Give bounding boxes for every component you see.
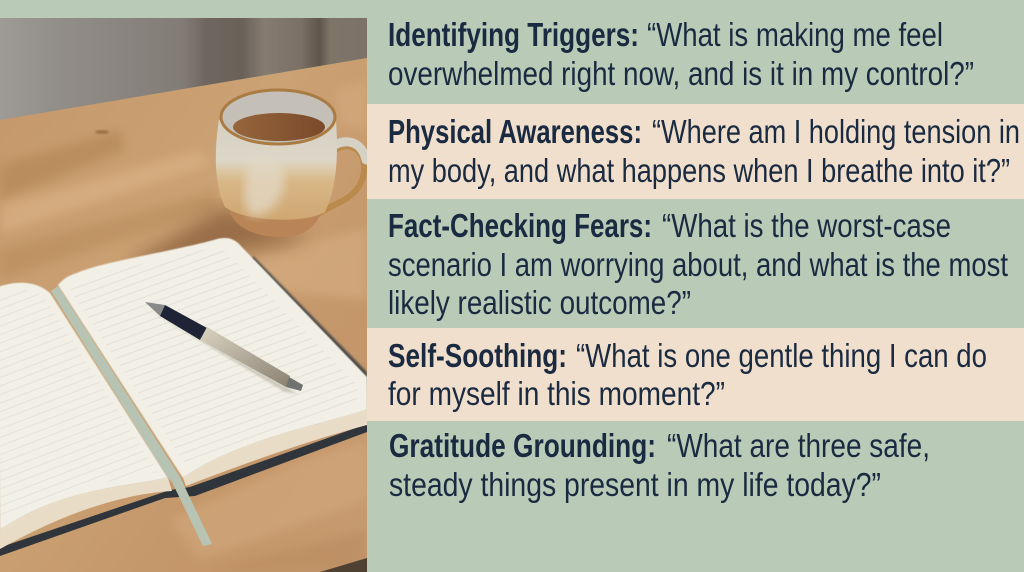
prompt heading: Fact-Checking Fears: bbox=[388, 207, 652, 244]
prompt heading: Self-Soothing: bbox=[388, 337, 567, 374]
prompt text: “What is the worst-case bbox=[662, 207, 951, 244]
mug rim bbox=[221, 90, 335, 144]
panel: gratitude grounding bbox=[367, 421, 1024, 572]
prompt heading: Gratitude Grounding: bbox=[389, 427, 656, 464]
panel: physical awareness bbox=[367, 104, 1024, 199]
mug foot bbox=[229, 210, 322, 237]
prompt heading: Identifying Triggers: bbox=[388, 16, 639, 53]
open notebook bbox=[0, 238, 367, 556]
panel: identifying triggers bbox=[367, 16, 1024, 104]
wooden table bbox=[0, 58, 367, 572]
icon: ceramic mug bbox=[216, 90, 366, 237]
tea bbox=[233, 113, 325, 141]
panel: self-soothing bbox=[367, 328, 1024, 421]
prompt text: “What is making me feel bbox=[647, 16, 943, 53]
prompt text line 2: for myself in this moment?” bbox=[388, 375, 725, 412]
left page bbox=[0, 283, 168, 530]
icon: pen bbox=[145, 302, 303, 391]
mug shadow bbox=[129, 199, 305, 259]
ribbon bookmark bbox=[51, 286, 212, 546]
pen shadow bbox=[164, 320, 296, 394]
wall with curtain bbox=[0, 18, 367, 128]
prompt text: “What are three safe, bbox=[667, 427, 930, 464]
page block bbox=[183, 410, 367, 486]
prompt text line 2: steady things present in my life today?” bbox=[389, 466, 881, 503]
panel: fact-checking fears bbox=[367, 199, 1024, 328]
photo: journal and mug on a wooden table bbox=[0, 18, 367, 572]
prompt text line 3: likely realistic outcome?” bbox=[388, 284, 691, 321]
prompt heading: Physical Awareness: bbox=[388, 113, 642, 150]
cover bbox=[0, 424, 367, 556]
right page bbox=[58, 238, 367, 478]
mug handle bbox=[318, 146, 364, 214]
mug body bbox=[216, 120, 337, 220]
